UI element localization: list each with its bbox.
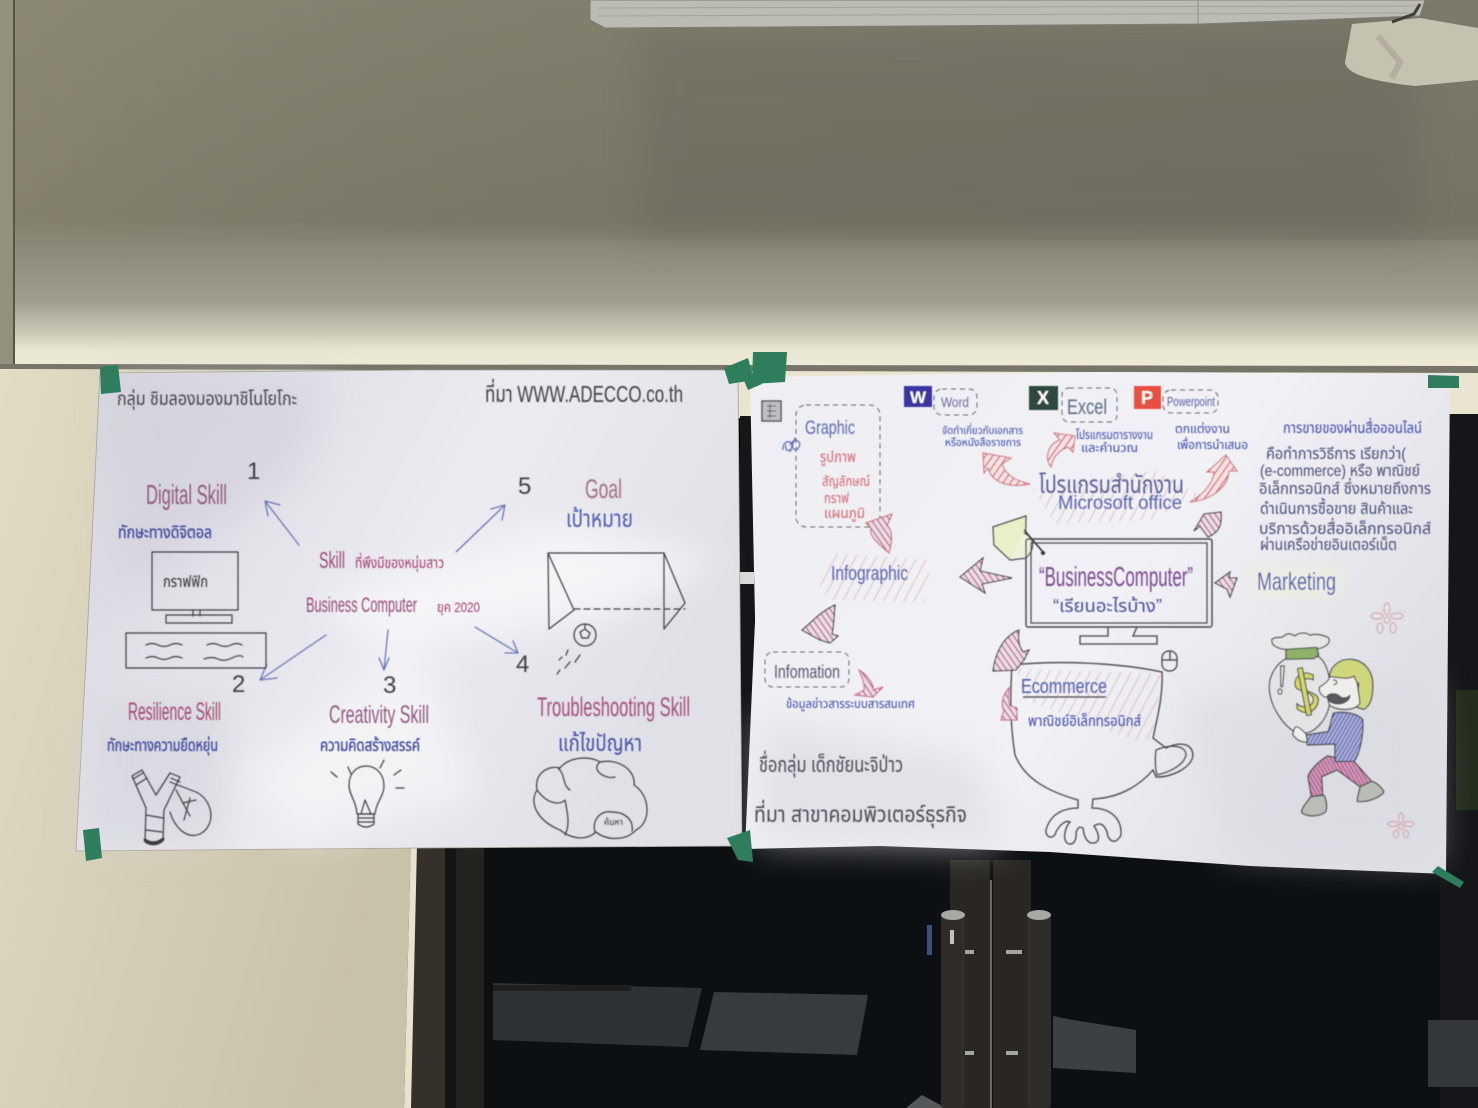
infographic hatch (815, 553, 931, 602)
word tile: W (910, 388, 927, 407)
paper wrinkle shading (760, 680, 1436, 860)
arrow to skill 5 (456, 505, 505, 552)
icon: slingshot (132, 770, 211, 845)
powerpoint description: ตกแต่งงาน (1175, 422, 1230, 436)
ecommerce label: Ecommerce (1021, 676, 1107, 698)
information box (765, 652, 849, 687)
online sales paragraph (1259, 445, 1431, 554)
powerpoint tile: P (1141, 388, 1153, 408)
ceiling vent (590, 0, 1425, 28)
man: bag green band (1286, 647, 1319, 659)
excel label: Excel (1067, 396, 1107, 419)
masking tape (83, 352, 1464, 888)
number 1: 1 (247, 458, 260, 485)
arrow: monitor to office (1194, 512, 1221, 537)
poster title: group name: กลุ่ม ชิมลองมองมาชิโนโยโกะ (117, 387, 297, 410)
arrow: information detail (855, 670, 883, 697)
graphic box: กราฟ (824, 490, 849, 506)
online sales paragraph: อิเล็กทรอนิกส์ ซึ่งหมายถึงการ (1259, 477, 1431, 498)
arrow to skill 4 (475, 627, 518, 653)
man: jacket and arm (1306, 712, 1363, 762)
graphic box: รูปภาพ (820, 449, 856, 466)
graphic box: สัญลักษณ์ (822, 473, 870, 489)
arrow to skill 3 (379, 630, 389, 670)
monitor (1026, 539, 1212, 644)
dark glass doors (404, 414, 1478, 1108)
office programs hatch (1033, 470, 1198, 524)
marketing wash (1250, 568, 1342, 598)
icon: computer (126, 552, 266, 668)
source line: ที่มา WWW.ADECCO.co.th (485, 378, 683, 407)
infographic label: Infographic (831, 563, 908, 585)
arrow to skill 2 (260, 635, 326, 680)
arrow: monitor to marketing (1215, 572, 1237, 597)
man: trousers (1308, 756, 1372, 797)
icon: mouse (1162, 651, 1177, 671)
number 2: 2 (232, 671, 245, 698)
man: hand (1293, 727, 1307, 742)
icon: brain cloud (534, 758, 647, 838)
online sales paragraph: คือทำการวิธีการ เรียกว่า( (1266, 445, 1407, 463)
creativity skill heading: Creativity Skill (329, 701, 429, 729)
excel label (1062, 388, 1117, 422)
arrow: to graphic (866, 514, 892, 553)
central heading: Business Computer (306, 594, 417, 617)
resilience skill thai: ทักษะทางความยืดหยุ่น (107, 736, 218, 756)
excel tile (1029, 386, 1058, 410)
central heading: ที่พึงมีของหนุ่มสาว (355, 552, 444, 572)
icon: blue squiggle (783, 438, 800, 452)
number 5: 5 (518, 473, 531, 500)
panel: left poster (76, 370, 742, 851)
online sales heading: การขายของผ่านสื่อออนไลน์ (1283, 417, 1422, 437)
wall unit at top right (1345, 4, 1478, 86)
man: moustache (1327, 694, 1350, 704)
icon: flower bottom (1388, 813, 1414, 838)
central heading: ยุค 2020 (437, 599, 480, 616)
arrow: to powerpoint (1190, 455, 1237, 502)
word description: หรือหนังสือราชการ (945, 437, 1021, 449)
icon: small card (762, 401, 781, 421)
number 3: 3 (383, 672, 396, 699)
man: dollar sign (1295, 673, 1318, 712)
graphic box: แผนภูมิ (824, 505, 865, 522)
man: money bag (1269, 657, 1330, 734)
word description: จัดทำเกี่ยวกับเอกสาร (942, 422, 1023, 437)
online sales paragraph: ผ่านเครือข่ายอินเตอร์เน็ต (1260, 536, 1397, 554)
central heading: Skill (319, 547, 345, 573)
word label: Word (941, 394, 969, 410)
icon: flower top (1371, 603, 1403, 633)
word description (942, 422, 1023, 449)
number 4: 4 (516, 651, 529, 678)
monitor subtitle: “เรียนอะไรบ้าง” (1053, 596, 1162, 616)
illustration: man carrying money bag (1269, 633, 1384, 816)
marketing label: Marketing (1257, 568, 1336, 596)
icon: brain cloud: ค้นหา (604, 817, 623, 827)
man: bag ruffle (1272, 633, 1329, 649)
icon: light bulb (331, 760, 404, 827)
wall band behind posters (0, 368, 1478, 418)
source credit: ที่มา สาขาคอมพิวเตอร์ธุรกิจ (754, 799, 967, 828)
central heading (306, 547, 480, 617)
door frame and handles (927, 860, 1051, 1108)
ecommerce description: พาณิชย์อิเล็กทรอนิกส์ (1028, 712, 1141, 730)
arrow: ecommerce detail (1001, 688, 1017, 720)
information description: ข้อมูลข่าวสารระบบสารสนเทศ (786, 697, 915, 711)
panel: right poster (745, 372, 1450, 874)
microsoft office: Microsoft office (1058, 493, 1182, 514)
group name: ชื่อกลุ่ม เด็กชัยนะจิป่าว (759, 750, 903, 778)
ledge line (0, 364, 1478, 373)
powerpoint description: เพื่อการนำเสนอ (1177, 436, 1248, 452)
ecommerce chair (1011, 663, 1193, 844)
wall above ledge (0, 0, 1478, 368)
man: front shoe (1357, 781, 1384, 802)
icon: computer: กราฟฟิก (163, 574, 208, 591)
goal heading: Goal (585, 474, 622, 504)
online sales paragraph: (e-commerce) หรือ พาณิชย์ (1260, 463, 1420, 480)
troubleshooting thai: แก้ไขปัญหา (558, 730, 642, 756)
office programs heading: โปรแกรมสำนักงาน (1039, 471, 1184, 499)
digital skill heading: Digital Skill (146, 479, 227, 510)
arrow to skill 1 (265, 501, 299, 545)
arrow: monitor to infographic (960, 558, 1012, 593)
digital skill thai: ทักษะทางดิจิตอล (118, 523, 212, 542)
excel tile: X (1037, 388, 1049, 408)
paper sheet (745, 372, 1450, 874)
paper wrinkle shading (85, 380, 720, 845)
excel description: และคำนวณ (1081, 441, 1138, 455)
excel description (1076, 428, 1153, 455)
arrow: infographic to information (802, 605, 838, 643)
man: hair (1329, 659, 1373, 709)
graphic box (796, 405, 880, 527)
creativity skill thai: ความคิดสร้างสรรค์ (320, 735, 420, 755)
monitor title: “BusinessComputer” (1039, 561, 1193, 592)
arrow: to excel (1048, 433, 1075, 467)
word label (934, 389, 977, 415)
online sales paragraph: ดำเนินการซื้อขาย สินค้าและ (1260, 497, 1413, 518)
goal thai: เป้าหมาย (566, 506, 633, 533)
icon: goal net and football (548, 553, 685, 674)
icon: mortar board (993, 516, 1045, 560)
man: eye (1333, 680, 1337, 685)
excel description: โปรแกรมตารางงาน (1076, 428, 1153, 442)
man: face (1319, 676, 1360, 709)
wall below ledge, left (0, 370, 420, 1108)
powerpoint label: Powerpoint (1167, 394, 1215, 409)
resilience skill heading: Resilience Skill (128, 698, 221, 726)
powerpoint label (1163, 390, 1218, 413)
online sales paragraph: บริการด้วยสื่ออิเล็กทรอนิกส์ (1259, 517, 1431, 538)
troubleshooting heading: Troubleshooting Skill (537, 692, 690, 722)
word tile (904, 386, 932, 407)
information box: Infomation (774, 662, 840, 682)
arrow: monitor to ecommerce (993, 630, 1029, 671)
paper sheet (76, 370, 742, 851)
graphic box: Graphic (805, 418, 855, 439)
powerpoint description (1175, 422, 1248, 452)
powerpoint tile (1134, 386, 1161, 409)
man: exclamation mark on bag (1278, 666, 1284, 694)
man: back shoe (1302, 795, 1327, 816)
arrow: to word (983, 453, 1030, 485)
